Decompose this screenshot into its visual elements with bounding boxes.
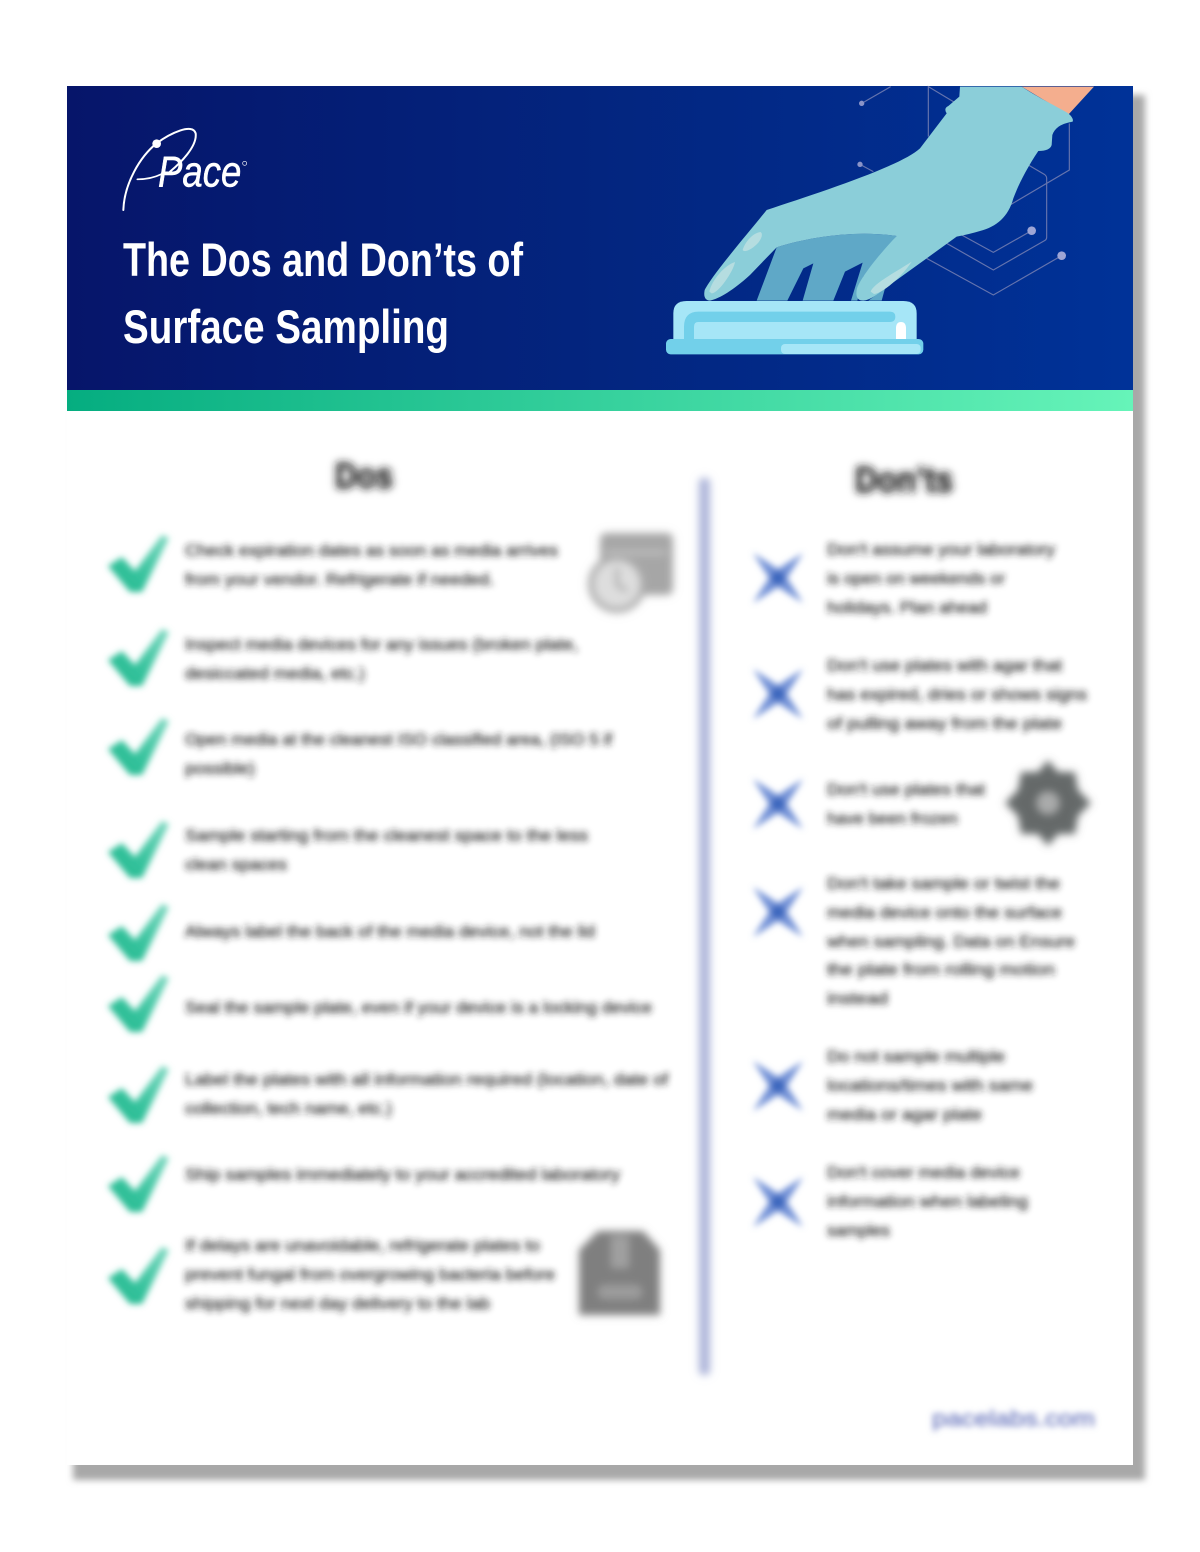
item 1: from your vendor. Refrigerate if needed. [185,570,494,589]
item 2: desiccated media, etc.) [185,664,365,683]
item 4: when sampling. Data on Ensure [826,932,1075,951]
green accent bar [67,390,1133,411]
item 5: locations/times with same [827,1076,1033,1095]
item 7 [108,1066,668,1123]
item 1: holidays. Plan ahead [827,598,987,617]
page card shadow [73,95,1145,1480]
item 9 [108,1236,555,1313]
glove [704,87,1073,301]
heading: Don'ts: Don’ts [855,459,953,500]
item 5: Always label the back of the media device, not the lid [185,922,595,941]
item 3 [108,718,612,778]
logo: Pace [123,129,247,210]
icon: gear [1005,760,1091,846]
item 2: Inspect media devices for any issues (broken plate, [185,635,578,654]
page card [67,86,1133,1465]
item 6: Don't cover media device [827,1163,1020,1182]
item 5 [753,1047,1033,1124]
panel: donts [753,459,1091,1240]
item 1 [108,535,558,592]
item 6: information when labeling [827,1192,1028,1211]
title: The Dos and Don’ts of [123,233,523,286]
glove highlights [743,232,762,251]
item 2 [753,656,1087,733]
item 1: Check expiration dates as soon as media arrives [185,541,558,560]
item 3: Open media at the cleanest ISO classified area, (ISO 5 if [185,730,612,749]
item 3: possible) [185,759,255,778]
panel: blurred body content [108,455,1095,1431]
item 1 [753,540,1056,617]
item 8 [108,1155,621,1212]
item 2: Don't use plates with agar that [827,656,1062,675]
title [123,233,523,353]
wrist [1022,87,1094,115]
item 4 [753,874,1075,1008]
item 4 [108,821,588,878]
item 5 [108,904,595,961]
item 4: clean spaces [185,855,287,874]
item 4: Sample starting from the cleanest space to the less [185,826,588,845]
divider [699,478,710,1375]
item 3: have been frozen [827,809,958,828]
item 7: Label the plates with all information required (location, date of [185,1070,668,1089]
item 6: samples [827,1221,890,1240]
item 2: of pulling away from the plate [827,714,1062,733]
logo: Pace: Pace [158,148,241,197]
item 9: shipping for next day delivery to the lab [185,1294,490,1313]
item 6: Seal the sample plate, even if your device is a locking device [185,998,652,1017]
item 6 [108,975,652,1032]
plate base [666,339,923,354]
network lines [857,87,1069,295]
item 4: instead [827,989,888,1008]
title: Surface Sampling [123,300,449,353]
panel: dos [108,455,673,1315]
item 5: media or agar plate [827,1105,982,1124]
item 3 [753,779,985,829]
item 5: Do not sample multiple [827,1047,1005,1066]
item 1: Don't assume your laboratory [827,540,1056,559]
footer url: pacelabs.com [932,1406,1095,1431]
header banner [67,86,1133,390]
illustration: gloved hand pressing contact plate [666,87,1094,354]
item 6 [753,1163,1028,1240]
item 4: Don't take sample or twist the [827,874,1060,893]
item 9: prevent fungal from overgrowing bacteria before [185,1265,555,1284]
item 1: is open on weekends or [827,569,1005,588]
item 9: If delays are unavoidable, refrigerate plates to [185,1236,540,1255]
plate lid [673,301,917,343]
icon: shipping package [579,1231,660,1315]
item 4: media device onto the surface [827,903,1062,922]
item 8: Ship samples immediately to your accredited laboratory [185,1165,621,1184]
item 2 [108,629,578,686]
item 4: the plate from rolling motion [827,960,1055,979]
item 7: collection, tech name, etc.) [185,1099,392,1118]
icon: calendar and clock [591,533,673,610]
heading: Dos: Dos [335,455,393,496]
back fingers [757,234,897,301]
item 2: has expired, dries or shows signs [827,685,1087,704]
item 3: Don't use plates that [827,780,985,799]
